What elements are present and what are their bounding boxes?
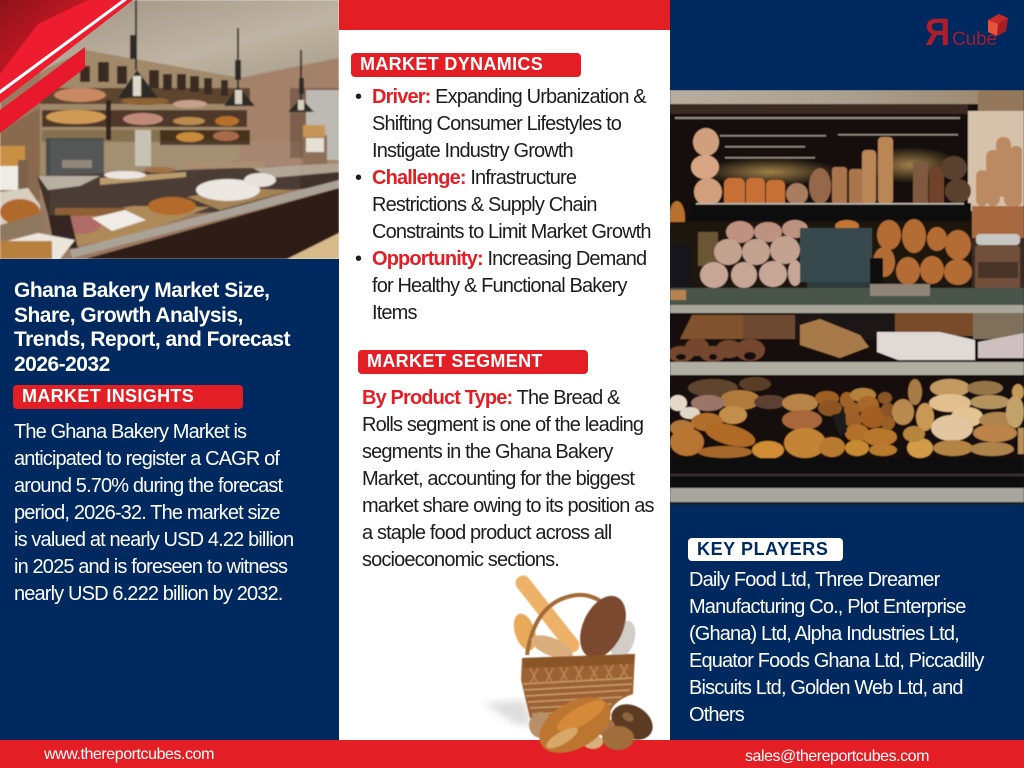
top loaves [693, 128, 719, 156]
bullets: • [355, 86, 362, 108]
bullets: • [355, 248, 362, 270]
heading: market insights [13, 385, 243, 409]
text: market segment: By Product Type: The Bread & [362, 387, 620, 409]
text: key players: Equator Foods Ghana Ltd, Piccadilly [689, 650, 984, 672]
bottom [670, 458, 1024, 488]
steel rail [670, 362, 1024, 375]
photo: bakery interior [0, 0, 339, 259]
text: market insights: is valued at nearly USD 4.22 billion [14, 529, 293, 551]
text: market dynamics list: Items [372, 302, 417, 324]
red corner ribbons [0, 0, 133, 133]
text: market dynamics list: Opportunity: Increasing Demand [372, 248, 646, 270]
text: market segment [362, 387, 654, 571]
text: market insights: around 5.70% during the forecast [14, 475, 282, 497]
heading: key players: KEY PLAYERS [697, 539, 828, 559]
text: market dynamics list: Constraints to Limit Market Growth [372, 221, 651, 243]
bottles row [80, 62, 228, 96]
footer: website: www.thereportcubes.com [44, 746, 214, 763]
heading: market insights: MARKET INSIGHTS [22, 386, 194, 406]
text: market dynamics list: Challenge: Infrastructure [372, 167, 576, 189]
text: market dynamics list: Instigate Industry Growth [372, 140, 573, 162]
top red band [339, 0, 670, 30]
footer bar [0, 740, 1024, 768]
heading: market segment [358, 350, 588, 374]
coffee machine [46, 138, 104, 178]
title: 2026-2032 [14, 353, 110, 376]
front counter [70, 180, 339, 258]
bullets [355, 86, 362, 270]
heading: market dynamics: MARKET DYNAMICS [360, 54, 543, 74]
text: market segment: segments in the Ghana Bakery [362, 441, 613, 463]
illustration: bread basket [487, 574, 654, 754]
pastries [669, 377, 1024, 459]
text: market segment: market share owing to its position as [362, 495, 654, 517]
glass case [50, 140, 300, 222]
text: key players: Daily Food Ltd, Three Dreamer [689, 569, 939, 591]
text: key players: (Ghana) Ltd, Alpha Industries Ltd, [689, 623, 959, 645]
text: key players: Manufacturing Co., Plot Enterprise [689, 596, 965, 618]
logo: RCube: Cube [952, 29, 997, 50]
logo: RCube [925, 12, 1008, 54]
text: market insights: nearly USD 6.222 billion by 2032. [14, 583, 282, 605]
bullets: • [355, 167, 362, 189]
footer: email: sales@thereportcubes.com [745, 748, 929, 765]
title: Trends, Report, and Forecast [14, 328, 290, 351]
heading: market dynamics [351, 53, 581, 77]
panel: right navy column [670, 0, 1024, 740]
glass shelf [670, 288, 1024, 305]
text: market dynamics list: for Healthy & Functional Bakery [372, 275, 627, 297]
text: key players [689, 569, 984, 726]
logo: RCube: Я [925, 12, 950, 54]
text: key players: Biscuits Ltd, Golden Web Ltd, and [689, 677, 963, 699]
shelving [40, 88, 250, 104]
stone wall [40, 50, 240, 195]
shelf goods [54, 88, 106, 102]
photo: bread display shelves [670, 90, 1024, 505]
text: market dynamics list [372, 86, 651, 324]
baguettes and basket [976, 137, 1022, 206]
text: market segment: Market, accounting for the biggest [362, 468, 634, 490]
text: key players: Others [689, 704, 744, 726]
text: market segment: a staple food product across all [362, 522, 611, 544]
text: market insights: The Ghana Bakery Market is [14, 421, 246, 443]
text: market insights [14, 421, 293, 605]
text: market insights: period, 2026-32. The market size [14, 502, 280, 524]
shelf lip [690, 203, 971, 220]
heading: market segment: MARKET SEGMENT [367, 351, 543, 371]
wicker body [521, 654, 635, 722]
text: market segment: Rolls segment is one of the leading [362, 414, 643, 436]
title: Ghana Bakery Market Size, [14, 279, 269, 302]
title [14, 279, 290, 376]
second shelf [670, 222, 972, 292]
back counter dark [37, 164, 339, 222]
text: market dynamics list: Shifting Consumer Lifestyles to [372, 113, 621, 135]
text: market dynamics list: Driver: Expanding Urbanization & [372, 86, 646, 108]
trays [50, 206, 210, 246]
third shelf [680, 315, 743, 339]
text: market insights: in 2025 and is foreseen to witness [14, 556, 287, 578]
text: market insights: anticipated to register a CAGR of [14, 448, 279, 470]
text: market segment: socioeconomic sections. [362, 549, 559, 571]
lamps [118, 0, 314, 112]
title: Share, Growth Analysis, [14, 304, 243, 327]
panel: left navy column [0, 259, 339, 740]
basket right baguettes [303, 135, 327, 165]
left goods [0, 164, 19, 190]
text: market dynamics list: Restrictions & Supply Chain [372, 194, 597, 216]
